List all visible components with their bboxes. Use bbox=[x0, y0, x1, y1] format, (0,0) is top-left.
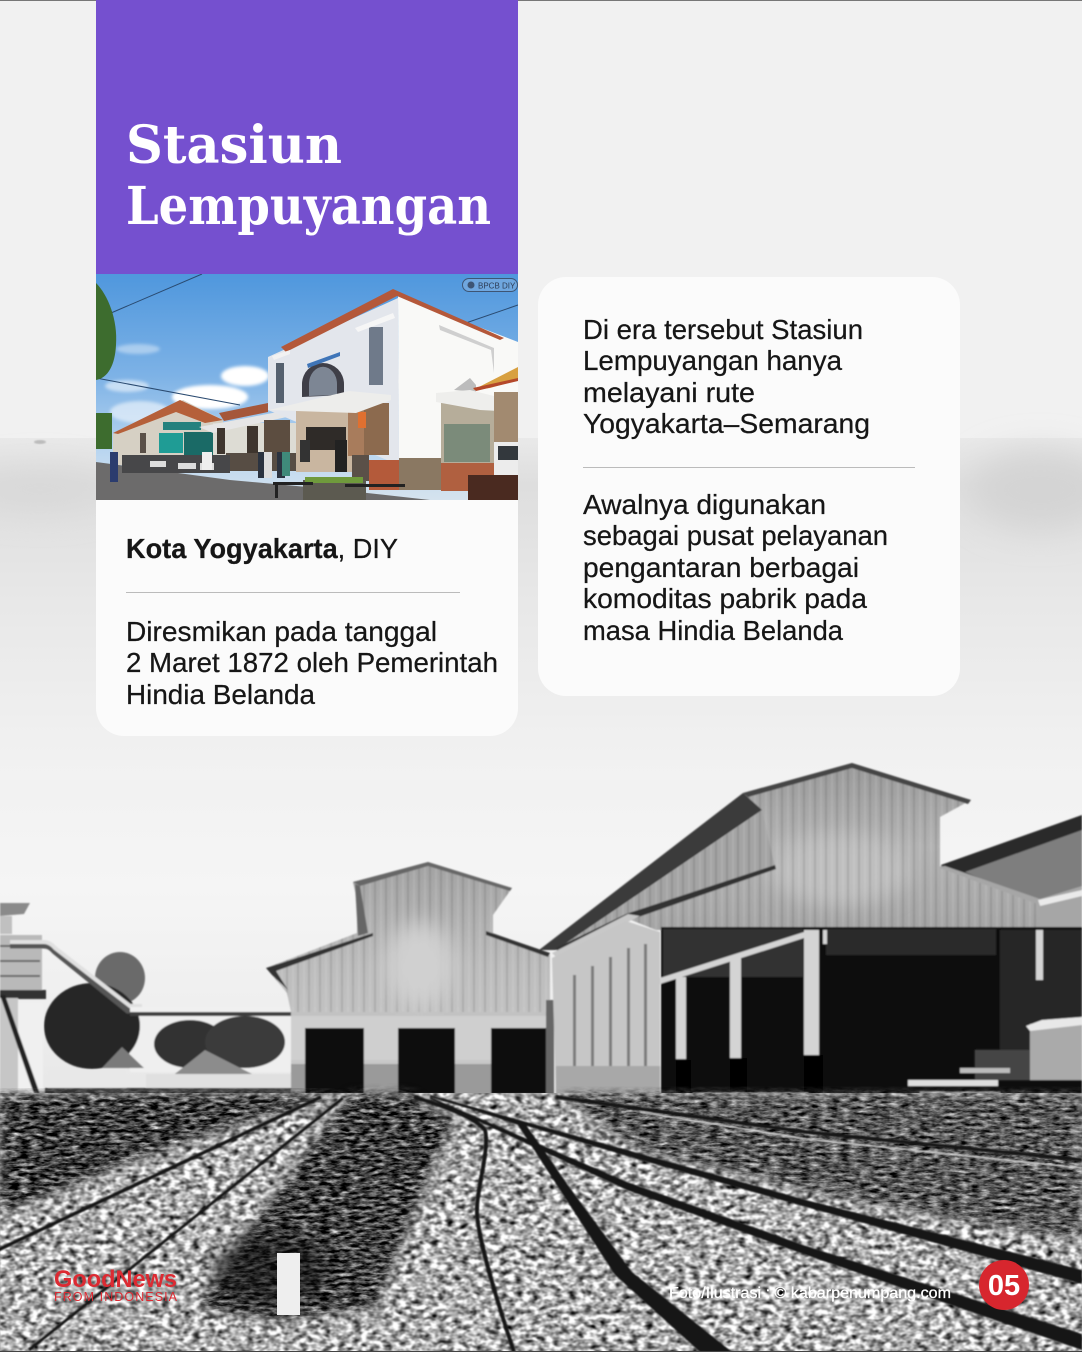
right canopy bbox=[441, 403, 494, 463]
route text: Yogyakarta–Semarang bbox=[583, 408, 870, 439]
title: Lempuyangan bbox=[126, 176, 491, 237]
route text: Lempuyangan hanya bbox=[583, 345, 842, 376]
watermark badge: BPCB DIY bbox=[478, 282, 516, 290]
middle wing bbox=[199, 403, 297, 471]
wires bbox=[96, 274, 518, 405]
function text: komoditas pabrik pada bbox=[583, 583, 867, 614]
sky bbox=[0, 438, 1082, 1118]
photo credit: Foto/Ilustrasi : © kabarpenumpang.com bbox=[669, 1285, 951, 1302]
function text: masa Hindia Belanda bbox=[583, 615, 843, 646]
title panel bbox=[96, 0, 518, 274]
gravel texture bbox=[0, 1093, 1082, 1352]
page number badge: 05 bbox=[988, 1270, 1020, 1302]
watermark badge bbox=[462, 278, 518, 292]
silo and conveyor bbox=[0, 903, 550, 1095]
function text: pengantaran berbagai bbox=[583, 552, 859, 583]
side roof bbox=[539, 793, 762, 950]
inauguration text bbox=[126, 616, 498, 710]
station colour photo bbox=[96, 274, 518, 500]
background photo: railway depot bbox=[0, 438, 1082, 1352]
route text: Di era tersebut Stasiun bbox=[583, 314, 863, 345]
doors bbox=[305, 1028, 546, 1094]
shed opening bbox=[661, 927, 1082, 1104]
right wing bbox=[940, 815, 1082, 930]
title: Stasiun bbox=[126, 115, 342, 176]
left info card bbox=[96, 500, 518, 736]
inauguration text: 2 Maret 1872 oleh Pemerintah bbox=[126, 647, 498, 678]
logo: FROM INDONESIA bbox=[54, 1290, 178, 1304]
shed side wall bbox=[552, 921, 660, 1098]
main station building bbox=[268, 289, 518, 491]
white marker post bbox=[277, 1253, 300, 1315]
right info card bbox=[538, 277, 960, 696]
title bbox=[126, 115, 491, 237]
rails bbox=[0, 1095, 1082, 1352]
function text: Awalnya digunakan bbox=[583, 489, 826, 520]
grass patches bbox=[0, 1094, 1082, 1320]
location: Kota Yogyakarta, DIY bbox=[126, 533, 398, 564]
ground bbox=[0, 1093, 1082, 1352]
old wing bbox=[113, 400, 223, 465]
road, bikes, people bbox=[96, 440, 518, 500]
fence and base bbox=[369, 460, 399, 490]
tower and front bbox=[626, 763, 1040, 930]
columns bbox=[660, 930, 1043, 1059]
clouds bbox=[105, 344, 269, 423]
route text: melayani rute bbox=[583, 377, 755, 408]
large shed bbox=[539, 763, 1082, 1110]
inauguration text: Hindia Belanda bbox=[126, 679, 315, 710]
page number badge bbox=[979, 1260, 1029, 1310]
function text: sebagai pusat pelayanan bbox=[583, 520, 888, 551]
trees bbox=[96, 283, 116, 449]
trees and houses bbox=[44, 952, 295, 1096]
logo: GoodNews bbox=[54, 1266, 177, 1293]
inauguration text: Diresmikan pada tanggal bbox=[126, 616, 437, 647]
small shed and logs bbox=[1030, 1024, 1082, 1080]
route text bbox=[583, 314, 870, 439]
central building bbox=[266, 862, 554, 1097]
function text bbox=[583, 489, 888, 646]
